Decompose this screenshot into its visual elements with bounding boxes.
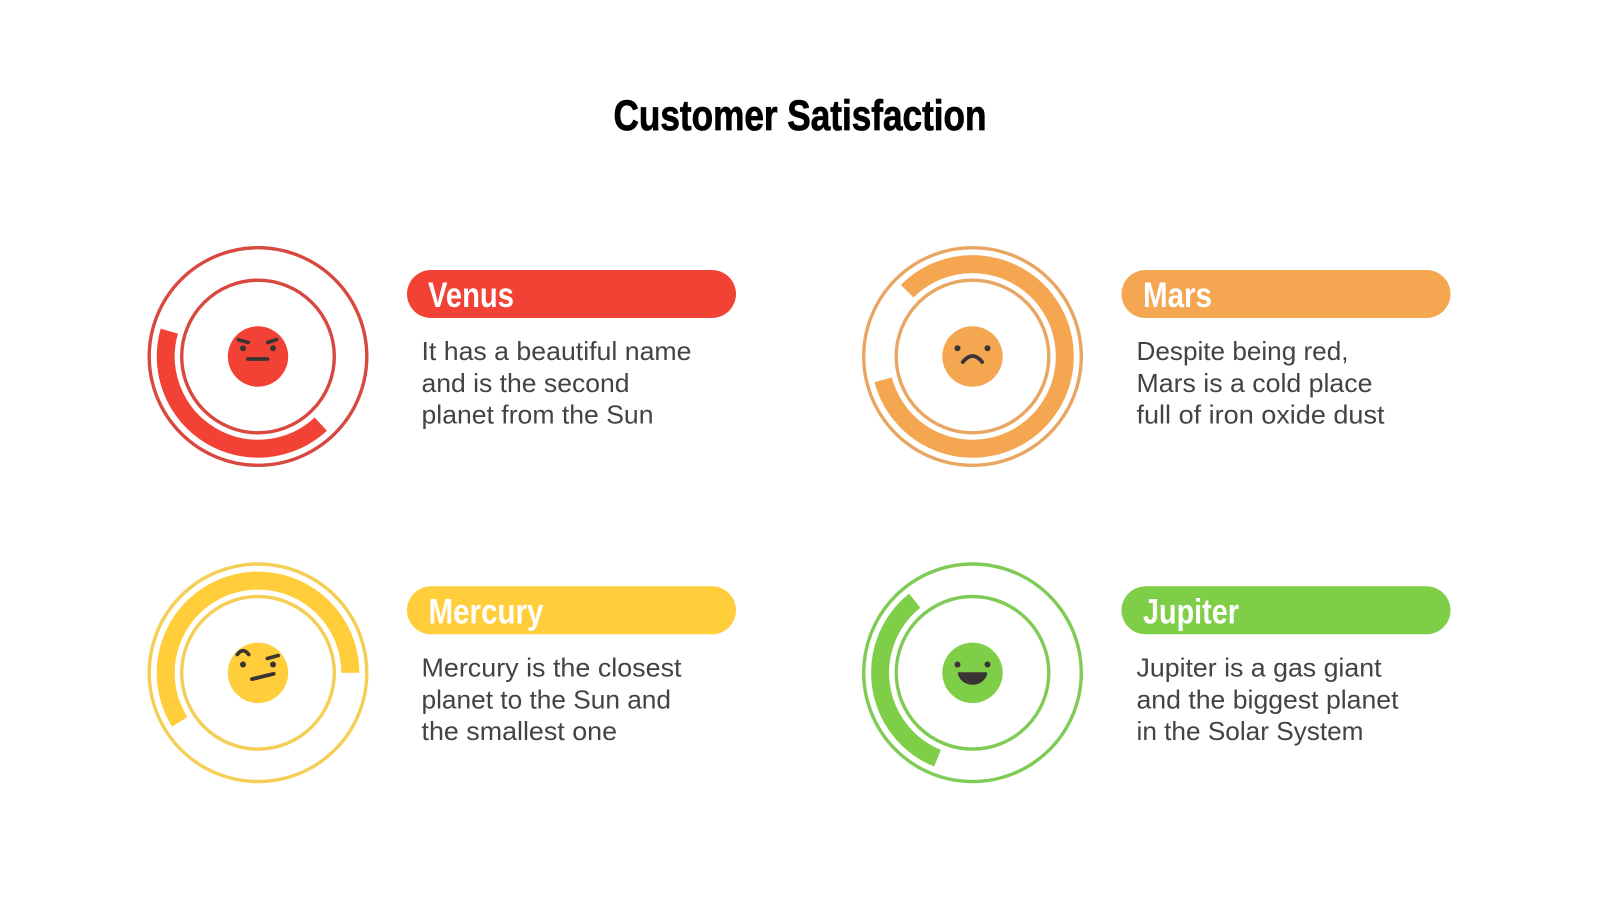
description: Venus: It has a beautiful name [422,336,692,366]
description: Mercury [422,652,682,746]
description: Mercury: planet to the Sun and [422,684,671,714]
label pill: Venus [407,270,736,318]
label pill: Venus: Venus [428,276,514,315]
icon: happy face [942,643,1003,703]
description: Venus [422,336,692,430]
panel: Mars [864,248,1450,465]
gauge: Jupiter [864,564,1081,782]
icon: angry face [228,326,288,387]
panel: Mercury [149,564,736,782]
description: Jupiter: Jupiter is a gas giant [1136,652,1382,682]
description: Mars [1136,336,1385,430]
label pill: Jupiter [1122,586,1450,634]
label pill: Mars: Mars [1143,276,1212,315]
description: Mercury: the smallest one [422,716,617,746]
description: Jupiter [1136,652,1399,746]
title: Customer Satisfaction [614,92,986,140]
description: Venus: and is the second [422,368,630,398]
icon: sad face [942,326,1003,387]
description: Venus: planet from the Sun [422,400,654,430]
label pill: Jupiter: Jupiter [1143,592,1239,631]
label pill: Mercury: Mercury [428,592,544,631]
label pill: Mars [1122,270,1450,318]
description: Jupiter: in the Solar System [1136,716,1364,746]
description: Mars: Mars is a cold place [1136,368,1372,398]
label pill: Mercury [407,586,736,634]
icon: skeptical face [228,643,288,703]
panel: Venus [149,248,736,465]
description: Jupiter: and the biggest planet [1136,684,1399,714]
gauge: Mercury [149,564,367,782]
description: Mars: full of iron oxide dust [1136,400,1385,430]
description: Mercury: Mercury is the closest [422,652,682,682]
description: Mars: Despite being red, [1136,336,1348,366]
gauge: Mars [864,248,1081,465]
panel: Jupiter [864,564,1450,782]
gauge: Venus [149,248,367,465]
